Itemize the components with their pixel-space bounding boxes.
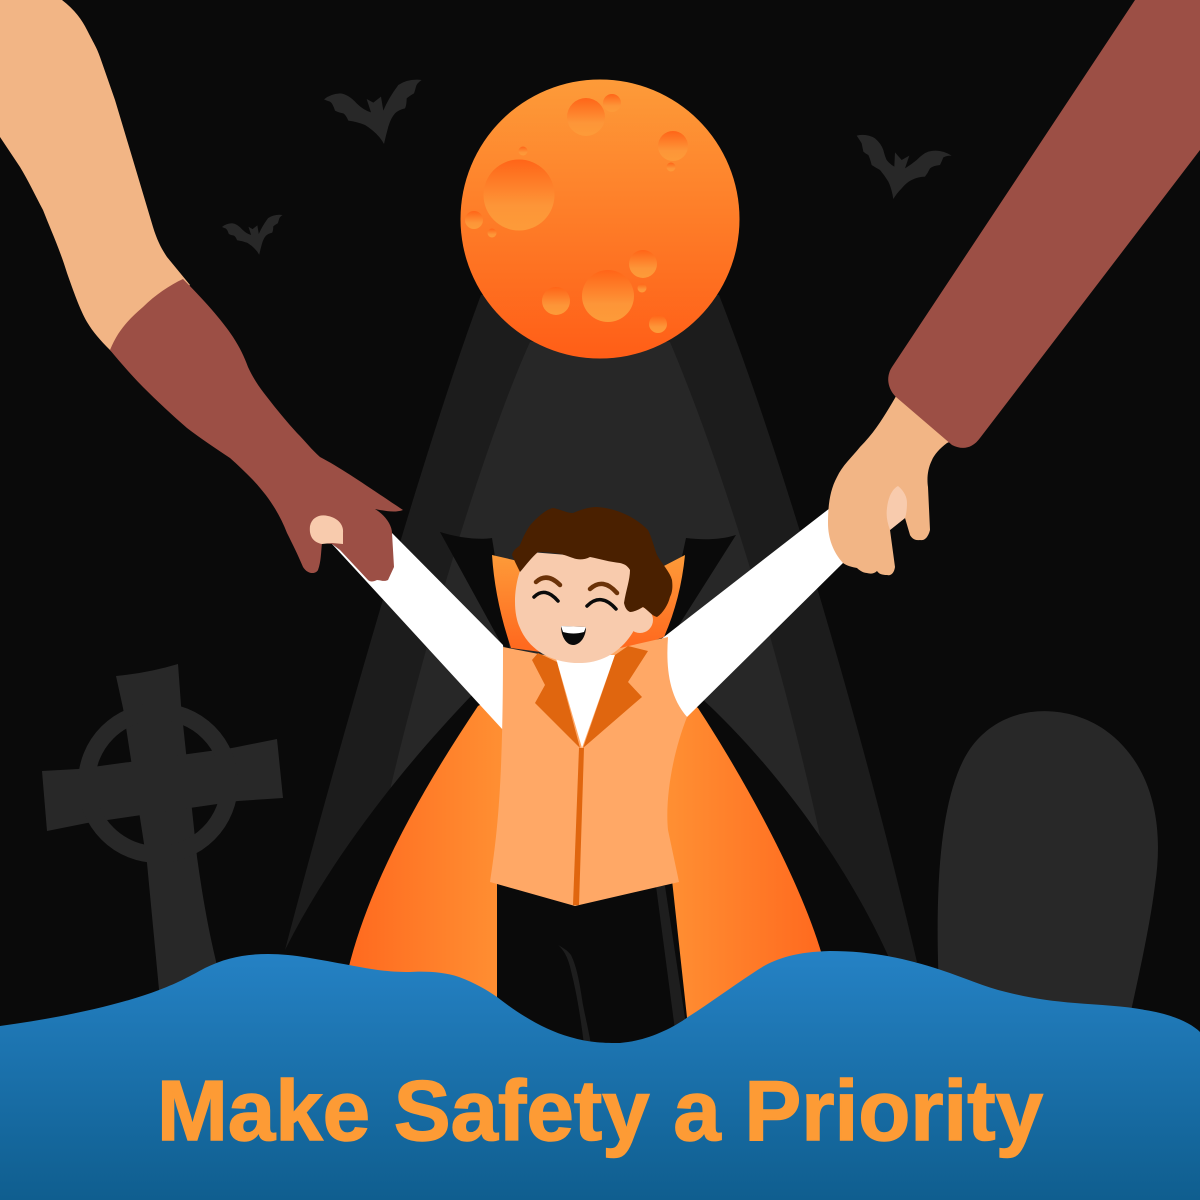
right arm hand <box>828 380 965 575</box>
right arm sleeve <box>888 0 1200 448</box>
vest zip <box>573 748 584 905</box>
mouth <box>561 626 586 645</box>
cape: orange <box>348 640 822 1030</box>
left lapel <box>532 653 580 748</box>
left adult arm <box>0 0 403 582</box>
eyebrows <box>536 578 617 593</box>
vest <box>490 637 687 906</box>
moon <box>460 80 740 358</box>
left sleeve <box>332 531 510 735</box>
hair <box>512 507 672 617</box>
vampire child <box>285 507 890 1060</box>
cape: black outer <box>285 695 890 985</box>
cape: black collar right <box>664 535 736 640</box>
rounded tombstone <box>938 711 1158 1025</box>
child's left hand <box>310 515 343 544</box>
right lapel <box>583 646 648 748</box>
right sleeve <box>660 508 843 717</box>
trouser highlights <box>558 886 686 1045</box>
left arm skin <box>0 0 190 355</box>
ear <box>627 607 653 633</box>
cape: black collar left <box>440 532 510 650</box>
celtic cross gravestone <box>42 664 283 1000</box>
face <box>515 552 640 663</box>
teeth <box>561 626 586 634</box>
moon craters <box>465 94 688 333</box>
bat: right <box>857 135 952 199</box>
left arm sleeve and hand <box>110 279 403 582</box>
child's right fingers <box>887 486 907 530</box>
title: Make Safety a Priority <box>157 1064 1043 1159</box>
shirt <box>555 655 615 748</box>
right adult arm <box>828 0 1200 575</box>
blue wave <box>0 951 1200 1200</box>
moonlight beam: inner <box>390 342 822 900</box>
bat: large left <box>324 80 422 144</box>
moonlight beam: outer <box>285 295 917 1000</box>
smiling eyes <box>534 592 616 609</box>
bat: small left <box>222 215 283 255</box>
cape: orange collar <box>492 555 685 660</box>
trousers <box>497 880 690 1060</box>
